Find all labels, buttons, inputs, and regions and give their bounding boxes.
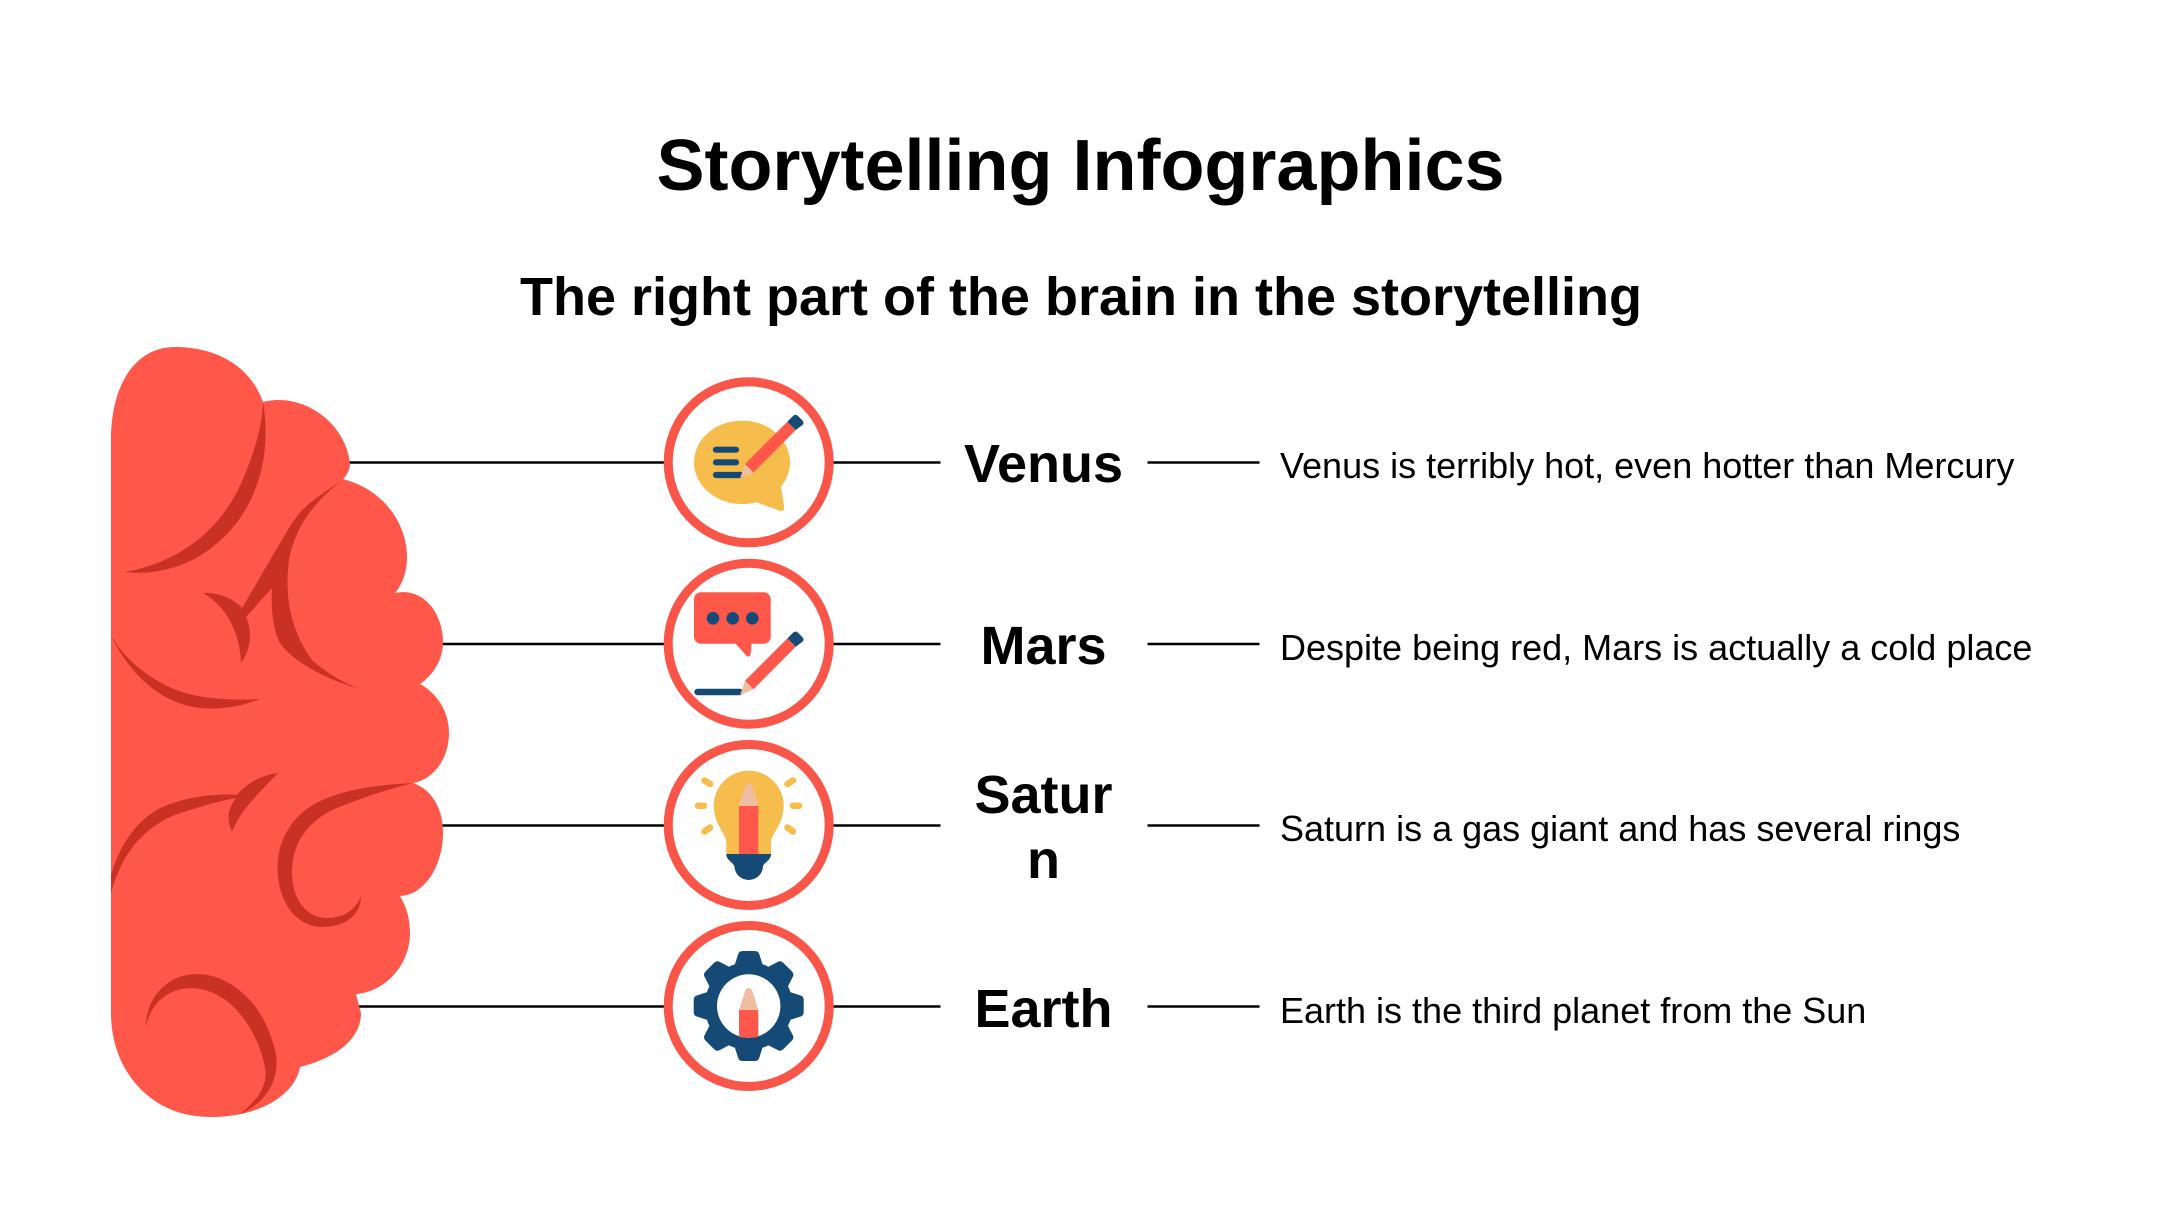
title: Storytelling Infographics bbox=[656, 126, 1505, 206]
brain illustration bbox=[111, 347, 449, 1117]
icon: gear with pencil bbox=[668, 926, 829, 1086]
icon: chat box with pencil bbox=[668, 563, 829, 724]
icon: light bulb with pencil bbox=[668, 744, 829, 906]
label: Saturn: n bbox=[1027, 830, 1060, 890]
label: Saturn: Satur bbox=[974, 765, 1113, 825]
icon: speech bubble with pencil bbox=[668, 382, 829, 543]
description: Saturn: Saturn is a gas giant and has several rings bbox=[1280, 808, 1960, 849]
connector lines bbox=[345, 462, 1260, 1006]
label: Venus: Venus bbox=[964, 434, 1123, 494]
label: Earth: Earth bbox=[974, 979, 1113, 1039]
description: Venus: Venus is terribly hot, even hotter than Mercury bbox=[1280, 445, 2014, 486]
subtitle: The right part of the brain in the storytelling bbox=[520, 267, 1642, 327]
description: Mars: Despite being red, Mars is actually a cold place bbox=[1280, 627, 2032, 668]
description: Earth: Earth is the third planet from the Sun bbox=[1280, 990, 1866, 1031]
label: Mars: Mars bbox=[980, 616, 1107, 676]
